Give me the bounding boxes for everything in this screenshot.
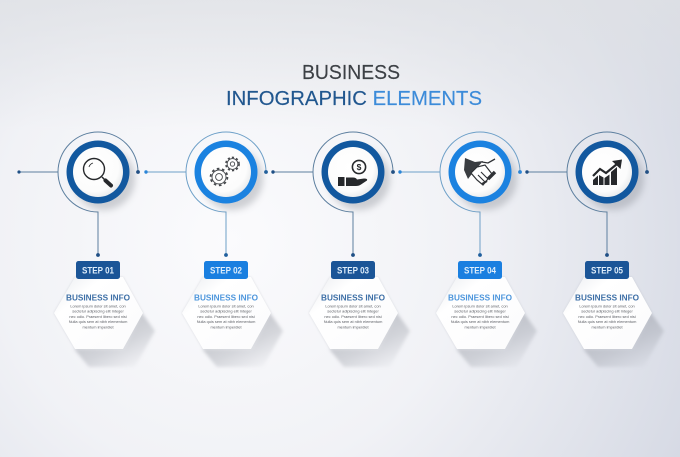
step badge: STEP 03 [337, 266, 369, 276]
step 1 node [17, 132, 140, 257]
heading: BUSINESS INFO [448, 292, 512, 302]
hexagon panel [309, 277, 398, 349]
body text: sectetur adipiscing elit Integer [72, 309, 124, 314]
connector lines [271, 132, 395, 257]
body text: Lorem ipsum dolor sit amet, con [579, 304, 635, 308]
body text: sectetur adipiscing elit Integer [327, 309, 379, 314]
icon: hand with dollar coin: $ [357, 162, 362, 172]
body text: mentum imperdiet [337, 325, 369, 330]
body text: Lorem ipsum dolor sit amet, con [70, 304, 126, 308]
step badge: STEP 02 [210, 266, 242, 276]
title [226, 62, 482, 110]
body text: mentum imperdiet [591, 325, 623, 330]
body text: mentum imperdiet [464, 325, 496, 330]
body text: mentum imperdiet [82, 325, 114, 330]
step 3 card [309, 261, 410, 367]
body text: Lorem ipsum dolor sit amet, con [198, 304, 254, 308]
hexagon panel [436, 277, 525, 349]
body text: nec odio. Praesent libero sed nisi [69, 314, 127, 319]
body text [578, 304, 636, 330]
body text [197, 304, 255, 330]
connector lines [525, 132, 649, 257]
title line: business: BUSINESS [302, 62, 400, 84]
heading: BUSINESS INFO [321, 292, 385, 302]
hexagon panel [182, 277, 271, 349]
step 2 card [182, 261, 283, 367]
step 5 card [563, 261, 664, 367]
body text: sectetur adipiscing elit Integer [454, 309, 506, 314]
body text [324, 304, 382, 330]
step 3 node [271, 132, 395, 257]
icon: gears [211, 157, 239, 185]
heading: BUSINESS INFO [66, 292, 130, 302]
step 1 card [54, 261, 155, 367]
body text: nec odio. Praesent libero sed nisi [451, 314, 509, 319]
connector lines [144, 132, 268, 257]
step 4 node [398, 132, 522, 257]
hexagon panel [54, 277, 143, 349]
body text [69, 304, 127, 330]
hexagon panel [563, 277, 652, 349]
body text: Lorem ipsum dolor sit amet, con [452, 304, 508, 308]
heading: BUSINESS INFO [194, 292, 258, 302]
connector lines [17, 132, 140, 257]
icon: magnifier [84, 158, 111, 186]
body text: nec odio. Praesent libero sed nisi [324, 314, 382, 319]
step 5 node [525, 132, 649, 257]
heading: BUSINESS INFO [575, 292, 639, 302]
icon: handshake [464, 158, 495, 185]
body text [451, 304, 509, 330]
step badge: STEP 01 [82, 266, 114, 276]
step 2 node [144, 132, 268, 257]
body text: nec odio. Praesent libero sed nisi [578, 314, 636, 319]
step 4 card [436, 261, 537, 367]
body text: Nulla quis sem at nibh elementum [451, 319, 509, 324]
body text: Lorem ipsum dolor sit amet, con [325, 304, 381, 308]
title line: infographic elements: INFOGRAPHIC ELEMENTS [226, 88, 482, 110]
body text: nec odio. Praesent libero sed nisi [197, 314, 255, 319]
body text: Nulla quis sem at nibh elementum [197, 319, 255, 324]
body text: Nulla quis sem at nibh elementum [69, 319, 127, 324]
step badge: STEP 05 [591, 266, 623, 276]
step badge: STEP 04 [464, 266, 496, 276]
connector lines [398, 132, 522, 257]
body text: Nulla quis sem at nibh elementum [578, 319, 636, 324]
body text: sectetur adipiscing elit Integer [200, 309, 252, 314]
body text: mentum imperdiet [210, 325, 242, 330]
icon: growth chart [593, 160, 622, 185]
body text: sectetur adipiscing elit Integer [581, 309, 633, 314]
body text: Nulla quis sem at nibh elementum [324, 319, 382, 324]
